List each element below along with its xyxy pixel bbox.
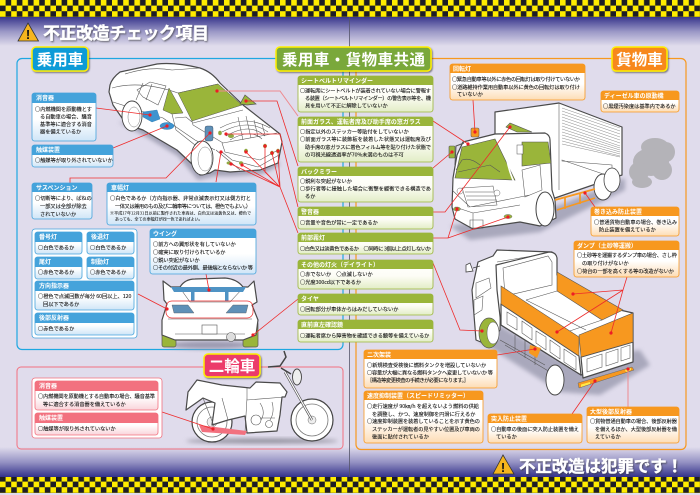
box: 二次架装 xyxy=(364,350,497,388)
box: 方向指示器: 方向指示器 xyxy=(39,282,69,290)
box: 二次架装: ［構造等変更検査の手続きが必要になります。］ xyxy=(367,376,469,384)
front wheel xyxy=(291,399,333,441)
box: 警音器 xyxy=(298,207,433,229)
box: 回転灯: ○緊急自動車等以外に赤色の回転灯は取り付けていないか xyxy=(452,75,580,83)
box: 制動灯 xyxy=(87,257,134,279)
box: 大型後部反射器: を備えるほか、大型後部反射器を備 xyxy=(595,425,677,433)
box: 前面ガラス: 前面ガラス、運転者席及び助手席の窓ガラス xyxy=(301,118,421,126)
box: 二輪 触媒装置 xyxy=(35,413,158,435)
bottom gradient band xyxy=(0,447,700,477)
badge: common xyxy=(276,47,431,71)
box: サスペンション: 一部又は全部が除去 xyxy=(40,202,87,210)
box: バックミラー: バックミラー xyxy=(301,168,337,176)
box: 大型後部反射器: ○貨物普通自動車の場合、後部反射器 xyxy=(590,417,678,425)
box: 番号灯: ○白色であるか xyxy=(38,244,74,252)
box: 尾灯: ○赤色であるか xyxy=(38,268,74,276)
box: 速度抑制装置 xyxy=(364,391,483,443)
box: シートベルトリマインダー: 具を用いて不正に解除していないか xyxy=(305,102,388,110)
box: 後部反射器: 後部反射器 xyxy=(39,314,69,322)
rear wheel xyxy=(122,101,142,131)
box: 突入防止装置: ○自動車の後面に突入防止装置を備え xyxy=(491,425,579,433)
box: 車幅灯: ○白色であるか（方向指示器、非常点滅表示灯又は側方灯と xyxy=(110,194,251,202)
cab mirror arm xyxy=(504,139,520,182)
illustration: box truck xyxy=(449,103,675,240)
box: ダンプ: ○荷台の一部を高くする等の改造がないか xyxy=(577,267,674,275)
box: ディーゼル車の原動機: ディーゼル車の原動機 xyxy=(604,92,664,100)
side window xyxy=(522,142,551,166)
box: 触媒装置: 触媒装置 xyxy=(36,146,60,154)
title: 不正改造チェック項目 xyxy=(43,23,209,43)
box: 警音器: ○音量や音色が常に一定であるか xyxy=(300,218,378,226)
box: その他の灯火 xyxy=(298,260,433,289)
box: その他の灯火: ○光度300cd以下であるか xyxy=(300,278,361,286)
box: 車幅灯 xyxy=(107,183,256,225)
box: 方向指示器 xyxy=(35,281,134,310)
box: 二次架装: ○容量が大幅に異なる燃料タンクへ変更していないか 等 xyxy=(367,368,493,376)
box: 巻き込み防止装置 xyxy=(591,207,679,236)
exhaust smoke xyxy=(629,138,675,188)
box: 速度抑制装置: ○走行速度が 90㎞/h を超えないよう燃料の供給 xyxy=(367,402,480,410)
box: ウイング: ○前方への翼形状を有していないか xyxy=(153,240,236,248)
box: 後部反射器: ○赤色であるか xyxy=(38,324,74,332)
box: 方向指示器: 回以下であるか xyxy=(43,301,79,308)
box: 後退灯: ○白色であるか xyxy=(90,244,126,252)
box: ウイング: ○その付近の最外側、最後端とならないか 等 xyxy=(153,264,253,272)
footer slogan: 不正改造は犯罪です！ xyxy=(519,456,683,476)
panel: passenger car frame xyxy=(17,58,343,350)
box: 消音器 xyxy=(32,93,96,141)
rear tire left xyxy=(162,322,176,347)
illustration: dump truck xyxy=(466,250,650,395)
box: 触媒装置 xyxy=(32,145,113,167)
box: ウイング: ウイング xyxy=(153,230,177,238)
dump rear wheel xyxy=(546,365,564,395)
wing highlight xyxy=(171,287,246,301)
lights xyxy=(218,131,280,165)
box: 二輪 消音器: 消音器 xyxy=(39,382,57,390)
illustration: motorcycle xyxy=(186,351,338,444)
box: シートベルトリマインダー: シートベルトリマインダー xyxy=(301,77,373,85)
box: その他の灯火: その他の灯火（デイライト） xyxy=(301,261,379,269)
rear gate xyxy=(579,313,633,357)
door mirror xyxy=(240,95,256,105)
box: 消音器: ○内燃機関を原動機とす xyxy=(35,105,92,113)
box: サスペンション: ○切断等により、ばねの xyxy=(35,194,92,202)
box: 車幅灯: 一体又は兼用のもの及び二輪車等については、橙色でもよい。） xyxy=(115,202,251,210)
illustration: sedan xyxy=(109,64,282,180)
box: 後部反射器 xyxy=(35,313,134,335)
box: 前面ガラス: ○指定以外のステッカー等貼付をしていないか xyxy=(300,128,409,136)
box: 大型後部反射器 xyxy=(587,407,679,443)
box: 大型後部反射器: えているか xyxy=(595,434,621,440)
box: 制動灯: ○赤色であるか xyxy=(90,268,126,276)
truck cab xyxy=(452,133,556,229)
box: 速度抑制装置: ○速度抑制装置を装着していることを示す黄色の xyxy=(367,417,480,425)
box: 番号灯: 番号灯 xyxy=(39,233,57,241)
box: 車幅灯: 車幅灯 xyxy=(111,184,129,192)
box: 二輪 消音器: 等に適合する消音器を備えているか xyxy=(43,400,126,408)
badge: motorcycle xyxy=(204,354,260,377)
box: タイヤ: タイヤ xyxy=(301,295,319,303)
box: 消音器: 器を備えているか xyxy=(40,128,81,136)
panel: truck frame xyxy=(356,58,686,450)
icon: warning triangle xyxy=(18,23,38,42)
box: ウイング: ○鋭い突起がないか xyxy=(153,256,200,264)
top checker stripe xyxy=(0,0,700,17)
box: 直前直左確認鏡 xyxy=(298,320,433,342)
box: 速度抑制装置: ステッカーが運転者の見やすい位置及び車両の xyxy=(372,425,480,433)
box: 大型後部反射器: 大型後部反射器 xyxy=(590,408,632,416)
leader lines xyxy=(70,91,628,429)
front wheel xyxy=(191,141,213,175)
side guard xyxy=(555,189,595,210)
windshield xyxy=(178,84,242,121)
exhaust xyxy=(226,332,236,342)
box: ダンプ: ○土砂等を運搬するダンプ車の場合、さし枠 xyxy=(577,251,677,259)
box: 回転灯: ていないか xyxy=(457,91,483,98)
box: サスペンション: されていないか xyxy=(40,211,76,218)
box: ディーゼル車の原動機: ○黒煙汚染度は基準内であるか xyxy=(603,102,676,110)
box: 回転灯: 回転灯 xyxy=(453,65,471,73)
icon: warning triangle: ! xyxy=(501,460,505,475)
box: 尾灯: 尾灯 xyxy=(39,258,51,266)
badge: truck xyxy=(612,47,667,71)
chassis xyxy=(500,335,550,372)
near side panel xyxy=(501,286,579,356)
box: ウイング xyxy=(150,229,256,274)
box: サスペンション: サスペンション xyxy=(36,185,77,192)
box: ダンプ: の取り付けがないか xyxy=(582,259,629,267)
box: 速度抑制装置: 速度抑制装置（スピードリミッター） xyxy=(367,392,469,400)
rear wheel xyxy=(192,402,232,442)
far side panel xyxy=(557,272,623,320)
icon: warning triangle xyxy=(493,455,514,475)
box: 二輪 触媒装置: ○触媒等が取り外されていないか xyxy=(38,424,116,432)
badge: truck: 貨物車 xyxy=(616,50,663,69)
box: 車幅灯: ※平成17年12月31日以前に製作された車両は、白色又は淡黄色又は、橙色で xyxy=(110,210,251,216)
tail lamps xyxy=(172,305,248,313)
box: ダンプ: ダンプ（土砂等運搬） xyxy=(577,242,637,250)
rear tire right xyxy=(243,322,258,347)
box: バックミラー: るか xyxy=(305,193,315,200)
box: シートベルトリマインダー: ○運転席にシートベルトが装着されていない場合に警報す xyxy=(300,86,431,94)
box: 巻き込み防止装置: ○普通貨物自動車の場合、巻き込み xyxy=(594,218,677,226)
box: 消音器: る自動車の場合、騒音 xyxy=(40,112,92,120)
box: シートベルトリマインダー: る装置（シートベルトリマインダー）の警告表示等を、機 xyxy=(305,94,432,102)
box: 二輪 消音器 xyxy=(35,381,158,410)
box: 二次架装: ○新規検査受検後に燃料タンクを増設していないか xyxy=(367,361,486,369)
box: 後退灯 xyxy=(87,232,134,254)
lower body xyxy=(501,304,581,375)
plate xyxy=(202,325,217,334)
muffler highlight xyxy=(199,425,247,435)
illustration: sedan rear view xyxy=(162,278,258,349)
box: 突入防止装置 xyxy=(488,414,582,443)
box: サスペンション xyxy=(32,183,92,219)
box: 消音器: 基準等に適合する消音 xyxy=(40,120,92,128)
rear wheels xyxy=(594,168,620,200)
box: バックミラー: ○鋭利な突起がないか xyxy=(300,177,352,185)
badge: common: 乗用車・貨物車共通 xyxy=(282,50,425,69)
cargo box xyxy=(495,103,622,198)
box: タイヤ xyxy=(298,294,433,315)
box: 前面ガラス xyxy=(298,117,433,162)
upper mirror xyxy=(506,123,532,132)
box: 突入防止装置: ているか xyxy=(496,434,517,440)
direction light outline xyxy=(166,301,253,318)
badge: motorcycle: 二輪車 xyxy=(209,358,255,376)
bottom checker stripe xyxy=(0,477,700,493)
box: 方向指示器: ○橙色で点滅回数が毎分 60回以上、120 xyxy=(38,292,131,300)
box: 二次架装: 二次架装 xyxy=(367,351,391,359)
box: 車幅灯: あっても、全ての車幅灯が同一色であればよい。 xyxy=(115,216,202,222)
box: 番号灯 xyxy=(35,232,82,254)
leader dots xyxy=(148,89,630,431)
box: 制動灯: 制動灯 xyxy=(91,258,109,266)
panel: motorcycle checks xyxy=(32,378,162,438)
box: 突入防止装置: 突入防止装置 xyxy=(491,415,527,423)
box: ウイング: ○確実に取り付けられているか xyxy=(153,248,225,256)
box: 後退灯: 後退灯 xyxy=(91,233,109,241)
box: 前面ガラス: 助手席の窓ガラスに着色フィルム等を貼り付けた状態で xyxy=(305,143,431,151)
box: その他の灯火: ○赤でないか ○点滅しないか xyxy=(300,270,373,278)
fork and handlebar xyxy=(285,372,312,420)
box: シートベルトリマインダー xyxy=(298,76,433,112)
box: バックミラー xyxy=(298,167,433,202)
box: 巻き込み防止装置: 巻き込み防止装置 xyxy=(594,208,642,216)
catalyst highlight xyxy=(160,122,174,130)
fog lamps xyxy=(454,207,512,218)
box: 速度抑制装置: 後面に貼付されているか xyxy=(372,432,429,440)
box: 直前直左確認鏡: ○運転者席から障害物を確認できる鏡等を備えているか xyxy=(300,332,429,340)
box: 速度抑制装置: を調整し、かつ、速度制御を円滑に行えるか xyxy=(372,410,475,418)
box: 前面ガラス: ○前面ガラス等に装飾板を装着した状態又は運転席及び xyxy=(300,135,432,143)
box: 回転灯 xyxy=(450,64,585,100)
dump cab xyxy=(472,250,565,345)
front wheel xyxy=(536,192,554,226)
box: タイヤ: ○回転部分が車体からはみだしていないか xyxy=(300,305,398,313)
box: バックミラー: ○歩行者等に接触した場合に衝撃を緩衝できる構造であ xyxy=(300,184,431,192)
panel: motorcycle frame xyxy=(17,367,343,449)
beacon xyxy=(471,128,479,137)
box: 前部霧灯 xyxy=(298,233,433,254)
top gradient band xyxy=(0,17,700,46)
badge: passenger car: 乗用車 xyxy=(37,51,83,69)
second fuel tank highlight xyxy=(529,345,541,358)
box: ディーゼル車の原動機 xyxy=(601,91,679,112)
icon: warning triangle: ! xyxy=(26,27,30,42)
box: 消音器: 消音器 xyxy=(36,94,54,102)
badge: passenger car xyxy=(32,47,88,71)
box: 巻き込み防止装置: 防止装置を備えているか xyxy=(599,226,656,234)
box: 警音器: 警音器 xyxy=(301,208,319,216)
box: ダンプ xyxy=(574,241,679,277)
dump front wheel xyxy=(479,318,499,348)
box: 尾灯 xyxy=(35,257,82,279)
suspension highlight xyxy=(205,126,213,141)
muffler highlight xyxy=(143,110,160,122)
box: 触媒装置: ○触媒等が取り外されていないか xyxy=(35,156,113,164)
box: 直前直左確認鏡: 直前直左確認鏡 xyxy=(301,321,343,329)
left mirror xyxy=(449,143,464,165)
box: 前面ガラス: の可視光線透過率が70%未満のものは不可 xyxy=(305,150,404,158)
box: 前部霧灯: 前部霧灯 xyxy=(301,234,325,242)
box: 二輪 触媒装置: 触媒装置 xyxy=(39,414,63,422)
box: 回転灯: ○道路維持作業用自動車以外に黄色の回転灯は取り付け xyxy=(452,83,580,91)
rear underrun bar xyxy=(578,367,634,388)
box: 前部霧灯: ○白色又は淡黄色であるか ○同時に 3個以上点灯しないか xyxy=(300,244,431,252)
panel: rear lamp group xyxy=(32,229,137,338)
side window xyxy=(163,88,183,114)
windshield xyxy=(455,139,515,180)
box: 二輪 消音器: ○内燃機関を原動機とする自動車の場合、騒音基準 xyxy=(38,392,155,400)
